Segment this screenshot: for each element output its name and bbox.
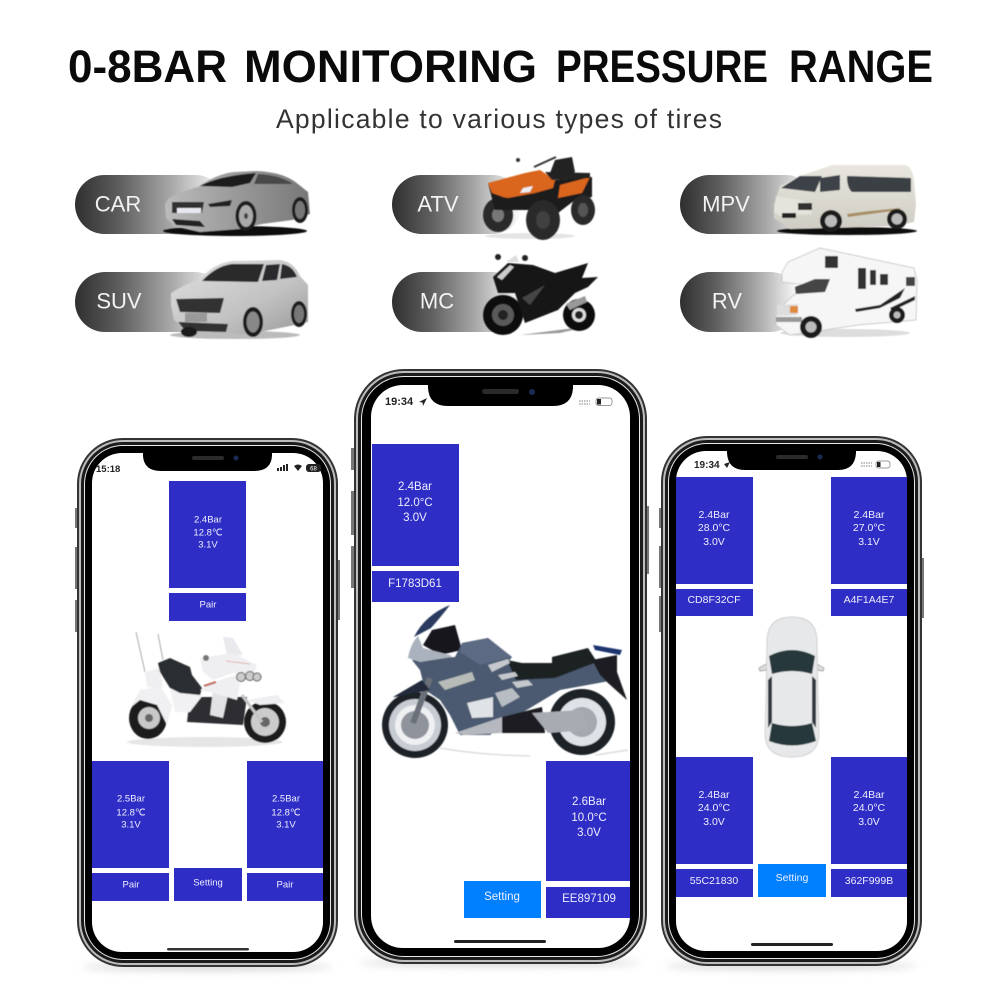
- sensor bottom left: 3.1V: [121, 820, 141, 830]
- sensor front: 3.0V: [403, 512, 427, 524]
- setting button: [758, 864, 826, 897]
- title: RANGE: [789, 41, 933, 92]
- id front: [372, 571, 459, 602]
- sensor bottom right: [247, 761, 323, 868]
- vehicle: car: [75, 171, 310, 236]
- sensor rear right: 24.0°C: [853, 802, 886, 814]
- sensor rear left: 2.4Bar: [699, 789, 730, 801]
- vehicle: mpv: MPV: [702, 192, 750, 216]
- subtitle: Applicable to various types of tires: [276, 104, 722, 134]
- pair button top: Pair: [200, 600, 216, 610]
- sensor bottom left: 12.8℃: [116, 808, 146, 818]
- vehicle: suv: SUV: [96, 288, 142, 314]
- sensor front left: 2.4Bar: [699, 509, 730, 521]
- phone: car app: [659, 436, 924, 969]
- id rear right: 362F999B: [845, 875, 893, 887]
- pair button right: [247, 873, 323, 901]
- title: 0-8BAR: [68, 41, 227, 92]
- sensor rear right: [831, 757, 907, 864]
- pair button left: [92, 873, 169, 901]
- vehicle: car: CAR: [95, 192, 141, 216]
- vehicle: mc: [392, 254, 598, 335]
- sensor rear: 10.0°C: [571, 812, 607, 824]
- phone frame left: [75, 438, 340, 970]
- vehicle: suv: [75, 260, 308, 339]
- title: PRESSURE: [556, 41, 768, 92]
- id rear left: [676, 869, 753, 897]
- phone frame right: [659, 436, 924, 969]
- sensor front: [372, 444, 459, 566]
- phone frame center: [351, 369, 649, 966]
- touring motorcycle illustration: [382, 605, 628, 758]
- sensor front left: [676, 477, 753, 584]
- phone: motorcycle trike app: [75, 438, 340, 970]
- status bar left: [96, 464, 321, 475]
- sensor rear right: 3.0V: [858, 816, 880, 828]
- vehicle: mc: MC: [420, 288, 454, 314]
- id rear: EE897109: [562, 893, 616, 905]
- sensor front left: 3.0V: [703, 536, 725, 548]
- top view car illustration: [759, 617, 824, 757]
- sensor rear: [546, 761, 630, 881]
- status bar right: [694, 460, 890, 471]
- sensor bottom right: 3.1V: [276, 820, 296, 830]
- sensor front right: 2.4Bar: [854, 509, 885, 521]
- pair button right: Pair: [277, 880, 293, 890]
- sensor rear left: 24.0°C: [698, 802, 731, 814]
- status bar center: 19:34: [385, 396, 414, 408]
- sensor front right: 27.0°C: [853, 522, 886, 534]
- id front left: [676, 589, 753, 616]
- id rear left: 55C21830: [690, 875, 738, 887]
- sensor front right: [831, 477, 907, 584]
- sensor rear left: 3.0V: [703, 816, 725, 828]
- sensor bottom right: 12.8℃: [271, 808, 301, 818]
- sensor bottom left: [92, 761, 169, 868]
- sensor rear left: [676, 757, 753, 864]
- sensor rear right: 2.4Bar: [854, 789, 885, 801]
- vehicle: rv: RV: [712, 288, 742, 314]
- id front left: CD8F32CF: [687, 594, 741, 606]
- sensor bottom right: 2.5Bar: [272, 794, 300, 804]
- sensor front: 12.0°C: [397, 497, 433, 509]
- id rear: [546, 887, 630, 918]
- setting button: [464, 881, 541, 918]
- sensor top: [169, 481, 246, 588]
- vehicle: rv: [680, 248, 917, 338]
- pair button top: [169, 593, 246, 621]
- vehicle: atv: [392, 157, 595, 240]
- sensor rear: 3.0V: [577, 827, 601, 839]
- trike illustration: [127, 632, 286, 747]
- vehicle: atv: ATV: [417, 192, 459, 216]
- id front right: A4F1A4E7: [844, 594, 895, 606]
- sensor front left: 28.0°C: [698, 522, 731, 534]
- status bar left: 68: [310, 466, 317, 472]
- id front right: [831, 589, 907, 616]
- sensor front right: 3.1V: [858, 536, 880, 548]
- title: MONITORING: [244, 41, 537, 92]
- setting button: Setting: [776, 872, 808, 884]
- vehicle: mpv: [680, 165, 917, 235]
- status bar left: 15:18: [96, 464, 120, 475]
- title: [68, 41, 933, 92]
- id rear right: [831, 869, 907, 897]
- sensor front: 2.4Bar: [398, 481, 432, 493]
- sensor top: 3.1V: [198, 540, 218, 550]
- sensor bottom left: 2.5Bar: [117, 794, 145, 804]
- sensor rear: 2.6Bar: [572, 796, 606, 808]
- id front: F1783D61: [388, 578, 442, 590]
- setting button: Setting: [484, 891, 520, 903]
- sensor top: 12.8℃: [193, 528, 223, 538]
- sensor top: 2.4Bar: [194, 514, 222, 526]
- status bar center: [385, 396, 612, 408]
- phone: motorcycle app: [351, 369, 649, 966]
- pair button left: Pair: [123, 880, 139, 890]
- setting button: Setting: [193, 878, 223, 888]
- status bar right: 19:34: [694, 460, 720, 471]
- setting button: [174, 868, 242, 901]
